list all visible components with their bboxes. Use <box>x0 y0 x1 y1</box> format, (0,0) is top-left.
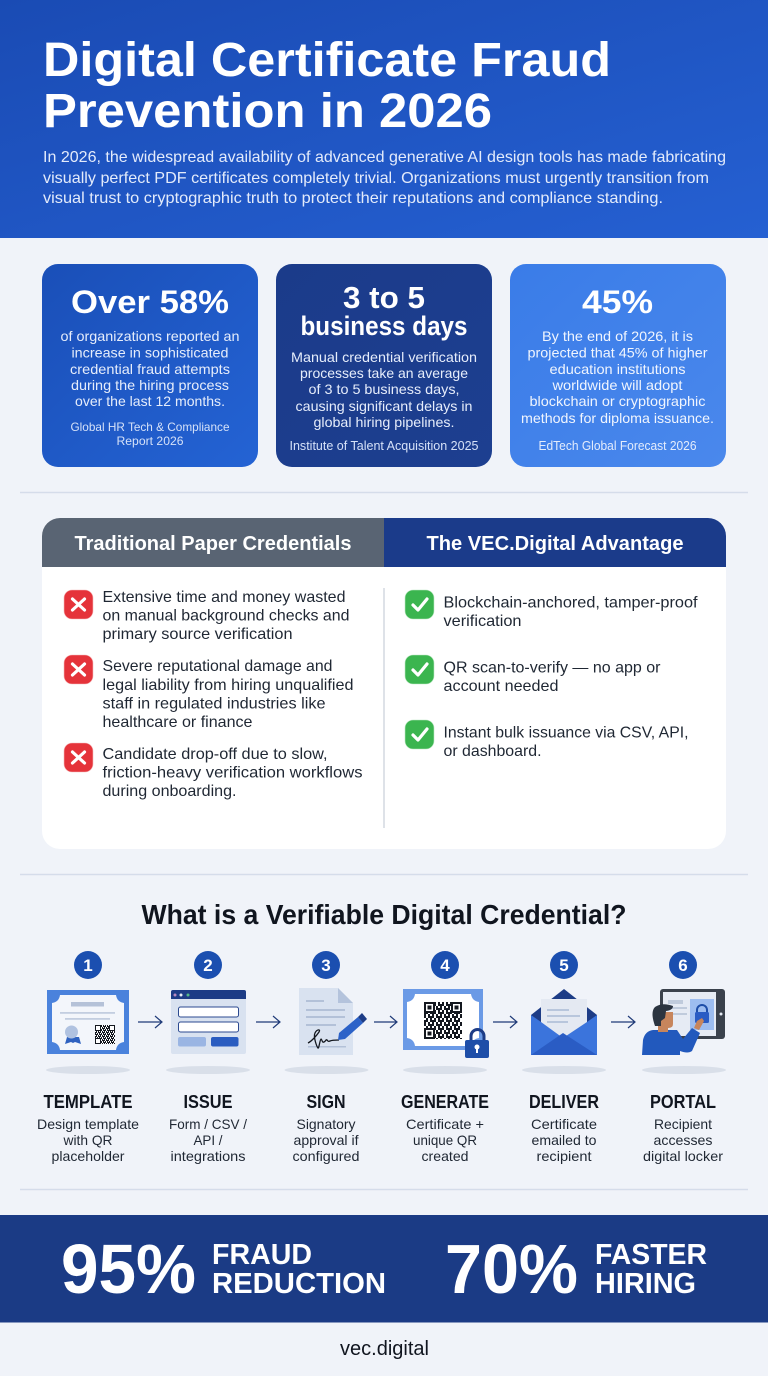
footer url: vec.digital <box>340 1338 429 1360</box>
stat card: 45%: blockchain or cryptographic <box>530 393 706 409</box>
title: Prevention in 2026 <box>43 85 492 138</box>
icon: envelope <box>531 989 597 1055</box>
icon: person using tablet portal <box>642 989 725 1055</box>
advantage 1 <box>405 590 698 630</box>
drawback 3: during onboarding. <box>102 783 236 800</box>
stat card: 3 to 5 business days: Manual credential verification <box>291 349 477 365</box>
arrow <box>138 1016 162 1028</box>
label: GENERATE <box>401 1092 489 1112</box>
title: Digital Certificate Fraud <box>43 34 611 87</box>
intro paragraph: visual trust to cryptographic truth to protect their reputations and compliance standing. <box>43 190 663 207</box>
stat card: 45%: methods for diploma issuance. <box>521 410 714 426</box>
stat card: Over 58%: over the last 12 months. <box>75 393 225 409</box>
advantage 2: QR scan-to-verify — no app or <box>444 660 661 676</box>
arrow <box>493 1016 517 1028</box>
step 2: issue: 2 <box>203 956 213 975</box>
drawback 2: Severe reputational damage and <box>102 658 332 675</box>
label: ISSUE <box>184 1092 232 1112</box>
step 4: generate: Certificate + <box>406 1116 484 1132</box>
step 5: deliver: 5 <box>559 956 569 975</box>
advantage 3 <box>405 720 688 760</box>
drawback 3 <box>64 743 362 800</box>
label: DELIVER <box>529 1092 599 1112</box>
step 4: generate: created <box>422 1148 468 1164</box>
drawback 2: staff in regulated industries like <box>102 696 326 712</box>
label: PORTAL <box>650 1092 716 1112</box>
step 6: portal: digital locker <box>643 1148 723 1164</box>
icon: red cross <box>64 743 93 772</box>
label: SIGN <box>306 1092 346 1112</box>
label: TEMPLATE <box>44 1092 132 1112</box>
stat card: 45%: education institutions <box>550 361 686 377</box>
stat card: 3 to 5 business days: processes take an average <box>300 365 468 381</box>
step 2: issue <box>166 951 250 1164</box>
intro paragraph: visually perfect PDF certificates completely trivial. Organizations must urgently transition from <box>43 170 709 187</box>
step 3: sign: approval if <box>294 1132 359 1148</box>
step 2: issue: API / <box>194 1132 223 1148</box>
drawback 1 <box>64 589 350 643</box>
stat card: 45%: projected that 45% of higher <box>528 344 708 360</box>
comparison header: VEC.Digital <box>384 518 726 567</box>
step 1: template: Design template <box>37 1116 139 1132</box>
icon: red cross <box>64 655 93 684</box>
stat card: 3 to 5 business days: 3 to 5 <box>343 280 425 315</box>
drawback 2: healthcare or finance <box>102 714 253 731</box>
drawback 3: friction-heavy verification workflows <box>102 764 362 782</box>
drawback 1: Extensive time and money wasted <box>102 589 346 606</box>
step 5: deliver: recipient <box>536 1148 592 1164</box>
section heading: What is a Verifiable Digital Credential? <box>142 899 626 930</box>
stat card: 45%: EdTech Global Forecast 2026 <box>538 439 697 453</box>
stat card: Over 58%: Global HR Tech & Compliance <box>70 420 230 434</box>
step 6: portal: accesses <box>654 1132 712 1148</box>
stat card: Over 58% <box>42 264 258 467</box>
drawback 3: Candidate drop-off due to slow, <box>102 746 328 763</box>
stat: 95% fraud reduction <box>61 1230 386 1308</box>
stat: 95% fraud reduction: 95% <box>61 1230 196 1308</box>
step 1: template: 1 <box>83 956 93 975</box>
icon: signed document <box>299 988 367 1055</box>
stat: 95% fraud reduction: FRAUD <box>212 1239 312 1271</box>
drawback 1: primary source verification <box>102 626 292 643</box>
comparison header: VEC.Digital: The VEC.Digital Advantage <box>426 533 684 555</box>
icon: green check <box>405 655 434 684</box>
intro paragraph: In 2026, the widespread availability of advanced generative AI design tools has made fabricating <box>43 149 726 166</box>
step 4: generate <box>401 951 489 1164</box>
icon: green check <box>405 590 434 619</box>
stat card: 3 to 5 business days: global hiring pipelines. <box>314 414 454 430</box>
icon: green check <box>405 720 434 749</box>
advantage 1: verification <box>444 613 522 630</box>
drawback 2 <box>64 655 354 731</box>
advantage 2 <box>405 655 661 695</box>
step 4: generate: 4 <box>440 956 450 975</box>
arrow <box>611 1016 635 1028</box>
stat card: Over 58%: increase in sophisticated <box>72 344 228 360</box>
step 5: deliver: Certificate <box>531 1116 597 1132</box>
advantage 1: Blockchain-anchored, tamper-proof <box>444 594 698 612</box>
step 4: generate: unique QR <box>413 1132 477 1148</box>
advantage 3: Instant bulk issuance via CSV, API, <box>444 724 688 742</box>
comparison header: traditional: Traditional Paper Credentials <box>74 533 352 555</box>
advantage 3: or dashboard. <box>444 743 542 760</box>
advantage 2: account needed <box>444 678 558 695</box>
icon: certificate <box>47 990 129 1054</box>
step 6: portal: 6 <box>678 956 688 975</box>
drawback 2: legal liability from hiring unqualified <box>102 677 354 694</box>
step 6: portal: Recipient <box>654 1116 712 1132</box>
stat card: 3 to 5 business days: Institute of Talent Acquisition 2025 <box>290 439 479 453</box>
stat: 95% fraud reduction: REDUCTION <box>212 1268 386 1300</box>
title <box>43 34 611 138</box>
stat card: 3 to 5 business days: of 3 to 5 business days, <box>308 381 460 397</box>
step 2: issue: integrations <box>170 1148 246 1164</box>
stat card: Over 58%: credential fraud attempts <box>70 361 230 377</box>
hero header panel <box>0 0 768 238</box>
stat card: Over 58%: Over 58% <box>71 284 229 320</box>
icon: QR certificate with lock <box>403 989 489 1058</box>
icon: red cross <box>64 590 93 619</box>
comparison header: traditional <box>42 518 384 567</box>
stat card: 45%: By the end of 2026, it is <box>542 328 693 344</box>
step 6: portal <box>642 951 726 1164</box>
stat: 70% faster hiring: FASTER <box>595 1239 707 1271</box>
arrow <box>374 1016 397 1028</box>
stat card: 3 to 5 business days: business days <box>300 311 468 341</box>
step 3: sign: Signatory <box>296 1116 356 1132</box>
step 1: template <box>37 951 139 1164</box>
stat: 70% faster hiring: HIRING <box>595 1268 696 1300</box>
step 3: sign: configured <box>292 1148 360 1164</box>
stat card: Over 58%: of organizations reported an <box>60 328 240 344</box>
stat card: 45%: 45% <box>582 284 653 320</box>
step 5: deliver: emailed to <box>532 1132 597 1148</box>
stat card: Over 58%: during the hiring process <box>71 377 229 393</box>
stat card: 45% <box>510 264 726 467</box>
step 2: issue: Form / CSV / <box>169 1116 247 1132</box>
intro paragraph <box>43 149 726 207</box>
stat card: 45%: worldwide will adopt <box>551 377 683 393</box>
stat card: Over 58%: Report 2026 <box>116 434 184 448</box>
stat: 70% faster hiring: 70% <box>445 1230 578 1308</box>
comparison panel <box>42 518 726 849</box>
stat card: 3 to 5 business days <box>276 264 492 467</box>
step 5: deliver <box>522 951 606 1164</box>
arrow <box>256 1016 280 1028</box>
step 1: template: placeholder <box>52 1148 125 1164</box>
stat: 70% faster hiring <box>445 1230 707 1308</box>
step 3: sign: 3 <box>321 956 331 975</box>
icon: web form <box>171 990 246 1054</box>
step 1: template: with QR <box>63 1132 112 1148</box>
step 3: sign <box>284 951 368 1164</box>
drawback 1: on manual background checks and <box>102 608 350 624</box>
stat card: 3 to 5 business days: causing significant delays in <box>296 398 472 414</box>
bottom stats band <box>0 1215 768 1322</box>
